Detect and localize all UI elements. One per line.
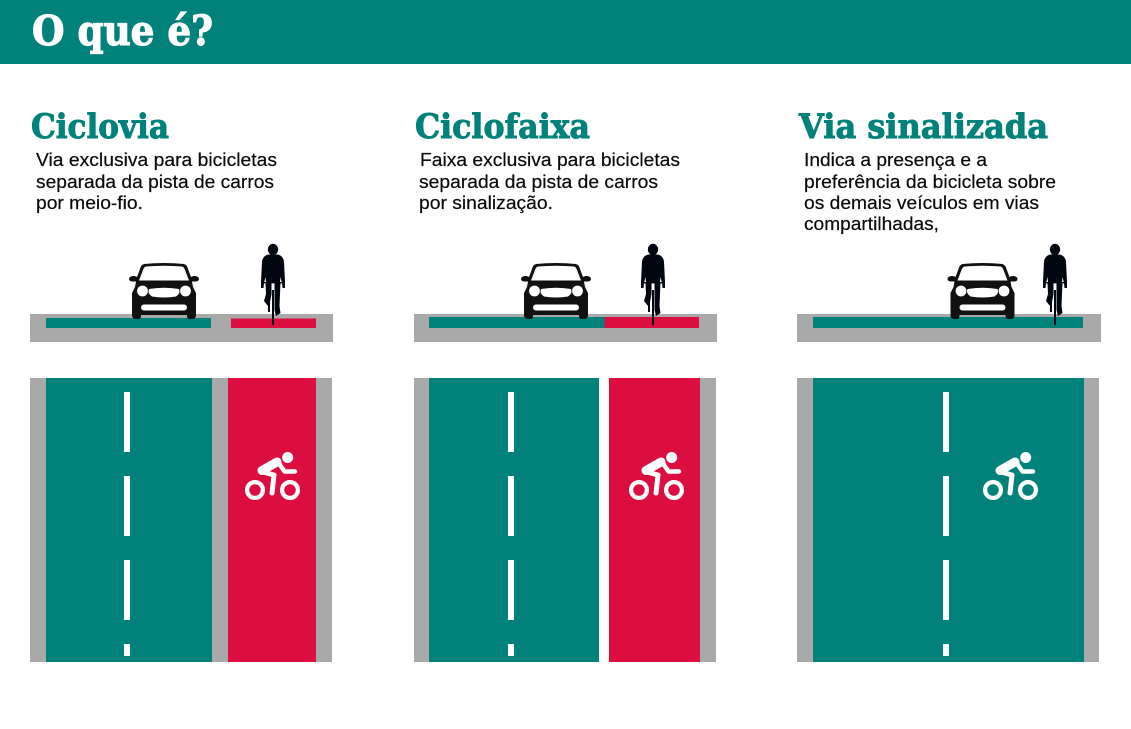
description: Via sinalizada: preferência da bicicleta sobre <box>804 171 1056 192</box>
panel: Ciclovia <box>30 107 333 662</box>
panel: Via sinalizada <box>797 107 1101 662</box>
description: Ciclovia <box>36 149 277 213</box>
heading: Ciclofaixa: Ciclofaixa <box>415 107 590 146</box>
icon: cyclist <box>641 244 665 326</box>
cross-section: Ciclovia <box>30 244 333 342</box>
panel: Ciclofaixa <box>414 107 717 662</box>
description: Ciclovia: por meio-fio. <box>36 192 143 213</box>
description: Ciclofaixa <box>419 149 680 213</box>
description: Via sinalizada: Indica a presença e a <box>804 149 988 170</box>
icon: car <box>129 263 199 319</box>
description: Ciclovia: Via exclusiva para bicicletas <box>36 149 277 170</box>
plan view: Ciclofaixa <box>414 378 716 662</box>
cross-section: Via sinalizada <box>797 244 1101 342</box>
icon: bicycle <box>985 452 1036 498</box>
plan view: Ciclovia <box>30 378 332 662</box>
icon: cyclist <box>1043 244 1067 326</box>
icon: car <box>948 263 1018 319</box>
description: Ciclofaixa: por sinalização. <box>419 192 553 213</box>
cross-section: Ciclofaixa <box>414 244 717 342</box>
heading: Ciclovia: Ciclovia <box>31 107 169 146</box>
icon: car <box>521 263 591 319</box>
icon: cyclist <box>261 244 285 326</box>
plan view: Via sinalizada <box>797 378 1099 662</box>
description: Ciclofaixa: Faixa exclusiva para bicicletas <box>420 149 680 170</box>
icon: bicycle <box>247 452 298 498</box>
icon: bicycle <box>631 452 682 498</box>
header banner <box>0 0 1131 64</box>
description: Ciclovia: separada da pista de carros <box>36 171 274 192</box>
description: Via sinalizada <box>804 149 1056 234</box>
title: O que é? <box>32 7 213 55</box>
description: Via sinalizada: os demais veículos em vias <box>804 192 1039 213</box>
description: Ciclofaixa: separada da pista de carros <box>419 171 658 192</box>
description: Via sinalizada: compartilhadas, <box>804 213 939 234</box>
heading: Via sinalizada: Via sinalizada <box>798 107 1048 146</box>
